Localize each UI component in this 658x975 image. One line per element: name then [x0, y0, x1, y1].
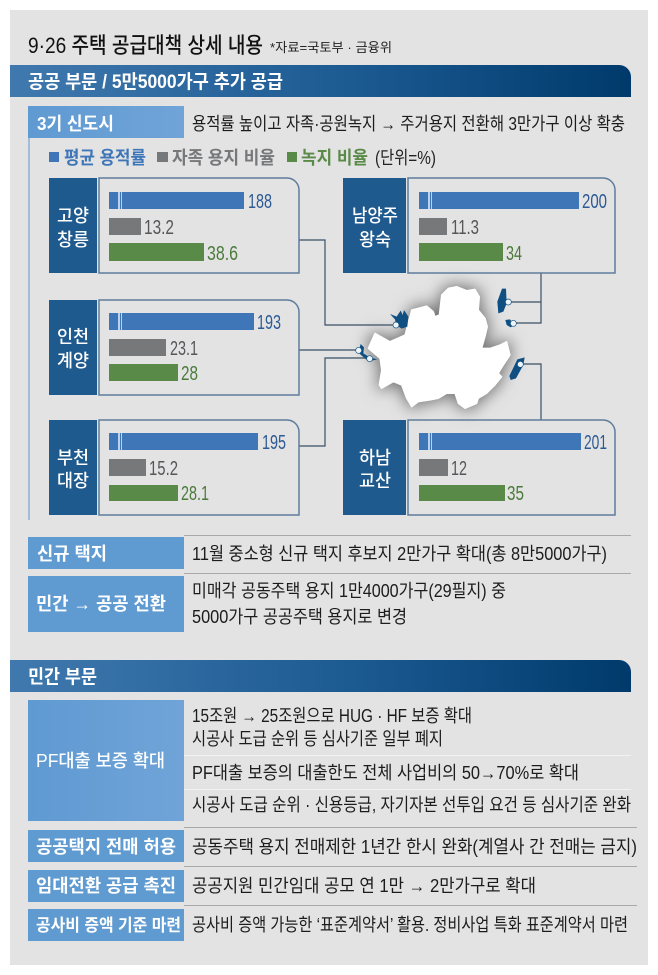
- map markers: [356, 299, 523, 367]
- card: Hanam Gyosan: 201: [584, 432, 607, 454]
- card: Incheon Gyeyang: 인천: [57, 327, 89, 347]
- legend: [49, 148, 436, 168]
- heading: private sector: [10, 660, 631, 692]
- card: Goyang Changneung: 188: [248, 191, 272, 213]
- card: Namyangju Wangsuk: 200: [582, 191, 607, 213]
- card: Incheon Gyeyang: 23.1: [170, 338, 198, 360]
- card: Incheon Gyeyang: 계양: [57, 351, 89, 371]
- card: Hanam Gyosan: 35: [507, 483, 524, 505]
- heading: public sector: 공공 부문 / 5만5000가구 추가 공급: [28, 71, 283, 93]
- row: private to public conversion: 미매각 공동주택 용지 1만4000가구(29필지) 중: [192, 581, 506, 601]
- legend: (단위=%): [375, 148, 436, 168]
- card: Hanam Gyosan: 12: [451, 458, 467, 480]
- card: Hanam Gyosan: 교산: [359, 471, 391, 491]
- heading: private sector: 민간 부문: [28, 666, 97, 688]
- map: Seoul: [358, 287, 525, 408]
- connector lines: [299, 240, 541, 446]
- card: Goyang Changneung: 고양: [57, 206, 89, 226]
- row: private to public conversion: 민간 → 공공 전환: [36, 594, 166, 614]
- card: Goyang Changneung: 13.2: [144, 217, 174, 239]
- card: Incheon Gyeyang: 28: [181, 363, 198, 385]
- row: public land resale: 공동주택 용지 전매제한 1년간 한시 완화(계열사 간 전매는 금지): [192, 837, 637, 857]
- row: new housing sites: 신규 택지: [37, 544, 107, 564]
- title: 9·26 주택 공급대책 상세 내용: [28, 33, 263, 58]
- row: public land resale: 공공택지 전매 허용: [36, 837, 176, 857]
- card: Incheon Gyeyang: 193: [257, 312, 281, 334]
- card: Bucheon Daejang: 195: [262, 432, 286, 454]
- legend: 자족 용지 비율: [172, 148, 275, 168]
- row: rental conversion supply: 공공지원 민간임대 공모 연 1만 → 2만가구로 확대: [192, 876, 536, 896]
- card: Bucheon Daejang: 15.2: [149, 458, 178, 480]
- card: Goyang Changneung: 38.6: [207, 243, 238, 265]
- card: Bucheon Daejang: 대장: [57, 471, 89, 491]
- card: Namyangju Wangsuk: [343, 178, 615, 273]
- card: Namyangju Wangsuk: 왕숙: [359, 230, 391, 250]
- card: Bucheon Daejang: [49, 420, 299, 515]
- legend: 녹지 비율: [301, 148, 368, 168]
- row: new housing sites: [28, 536, 631, 569]
- title: *자료=국토부 · 금융위: [270, 40, 392, 55]
- row: 3rd new towns: [28, 106, 625, 138]
- legend: 평균 용적률: [64, 148, 146, 168]
- row: PF loan guarantee expansion: [28, 700, 631, 821]
- row: PF loan guarantee expansion: PF대출 보증의 대출한도 전체 사업비의 50→70%로 확대: [192, 763, 579, 783]
- districts: [390, 310, 408, 329]
- panel outline: 3rd new towns: [28, 138, 30, 520]
- card: Namyangju Wangsuk: 남양주: [352, 206, 398, 226]
- card: Incheon Gyeyang: [49, 300, 299, 395]
- row: PF loan guarantee expansion: 15조원 → 25조원으로 HUG · HF 보증 확대: [192, 706, 472, 726]
- row: public land resale: [28, 828, 637, 862]
- card: Bucheon Daejang: 부천: [57, 448, 89, 468]
- heading: public sector: [10, 65, 631, 97]
- card: Bucheon Daejang: 28.1: [181, 483, 209, 505]
- card: Goyang Changneung: [49, 178, 299, 273]
- row: construction cost increase criteria: 공사비 증액 기준 마련: [36, 916, 181, 935]
- row: 3rd new towns: 3기 신도시: [37, 114, 114, 134]
- row: construction cost increase criteria: [28, 906, 637, 941]
- card: Namyangju Wangsuk: 11.3: [451, 217, 479, 239]
- row: private to public conversion: [28, 574, 631, 632]
- row: private to public conversion: 5000가구 공공주택 용지로 변경: [192, 607, 407, 627]
- row: rental conversion supply: 임대전환 공급 촉진: [36, 876, 176, 896]
- card: Hanam Gyosan: [343, 420, 615, 515]
- card: Hanam Gyosan: 하남: [359, 448, 391, 468]
- row: new housing sites: 11월 중소형 신규 택지 후보지 2만가구 확대(총 8만5000가구): [192, 544, 607, 564]
- row: PF loan guarantee expansion: 시공사 도급 순위 등 심사기준 일부 폐지: [192, 729, 443, 749]
- card: Namyangju Wangsuk: 34: [506, 243, 522, 265]
- row: rental conversion supply: [28, 866, 637, 902]
- card: Goyang Changneung: 창릉: [57, 230, 89, 250]
- row: PF loan guarantee expansion: PF대출 보증 확대: [36, 751, 165, 771]
